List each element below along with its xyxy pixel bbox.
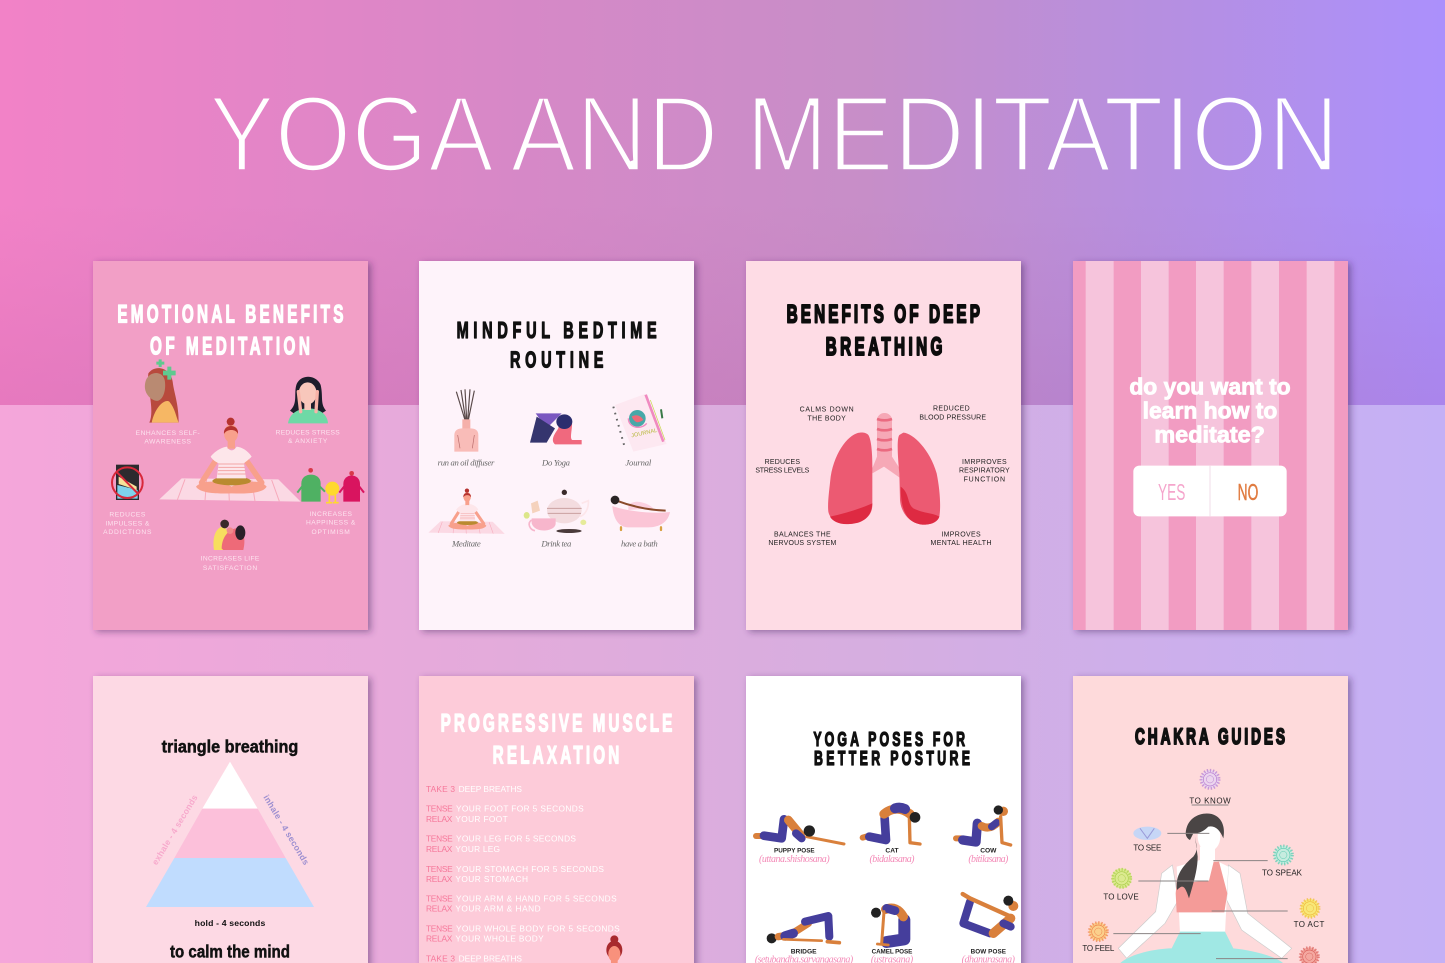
label: reduces stress — [276, 429, 340, 445]
icon: journal — [613, 394, 667, 452]
label: bridge pose — [755, 949, 854, 963]
icon: crown chakra — [1201, 770, 1219, 789]
label: to know: TO KNOW — [1189, 796, 1231, 805]
steps list — [426, 784, 620, 963]
label: calms down: CALMS DOWN — [800, 407, 854, 414]
icon: puppy pose — [756, 819, 844, 844]
label: reduces stress levels: STRESS LEVELS — [755, 468, 810, 475]
label: reduces impulses: REDUCES — [109, 512, 146, 519]
label: increases happiness — [306, 511, 356, 536]
label: reduces impulses: ADDICTIONS — [103, 529, 152, 536]
panel: emotional benefits of meditation — [93, 261, 368, 630]
icon: throat chakra — [1274, 846, 1293, 864]
icon: journal: JOURNAL — [631, 428, 658, 439]
heading: yoga poses: BETTER POSTURE — [814, 747, 970, 770]
striped background — [1086, 261, 1334, 630]
steps list: YOUR FOOT — [455, 814, 508, 824]
poll buttons: YES — [1158, 479, 1185, 505]
label: enhances self-awareness: ENHANCES SELF- — [136, 430, 200, 437]
label: puppy pose: (uttana.shishosana) — [759, 854, 830, 865]
label: cow pose: (bitilasana) — [968, 854, 1009, 865]
label: increases happiness: OPTIMISM — [311, 529, 350, 536]
heading: emotional benefits: EMOTIONAL BENEFITS — [117, 301, 343, 329]
label: reduced blood pressure: BLOOD PRESSURE — [919, 414, 986, 421]
poll buttons — [1133, 466, 1287, 516]
label: reduces impulses — [103, 512, 152, 536]
steps list: YOUR LEG — [455, 844, 500, 854]
steps list: RELAX — [426, 844, 453, 854]
label: improves mental health: IMPROVES — [941, 531, 981, 538]
panel: yoga poses for better posture — [746, 676, 1021, 963]
label: improves respiratory function: IMRPROVES — [962, 459, 1007, 466]
icon: crossed-out chocolate bar — [112, 465, 143, 500]
icon: cow pose — [956, 805, 1011, 845]
label: increases life satisfaction: SATISFACTION — [203, 565, 257, 572]
triangle chart — [146, 762, 314, 907]
label: increases happiness: INCREASES — [309, 511, 353, 518]
steps list: DEEP BREATHS — [459, 784, 522, 794]
panel: chakra guides — [1073, 676, 1348, 963]
heading: mindful bedtime routine: ROUTINE — [510, 347, 603, 373]
heading: question: learn how to — [1143, 397, 1277, 423]
steps list: YOUR ARM & HAND FOR 5 SECONDS — [456, 894, 617, 904]
label: calms down: THE BODY — [807, 415, 846, 422]
icon: camel pose — [871, 908, 904, 945]
label: improves mental health: MENTAL HEALTH — [930, 540, 991, 547]
label: increases life satisfaction — [201, 556, 260, 572]
label: hold: hold - 4 seconds — [195, 918, 266, 928]
label: drink tea: Drink tea — [540, 539, 571, 549]
label: reduces impulses: IMPULSES & — [105, 520, 150, 527]
label: to see: TO SEE — [1133, 844, 1161, 853]
icon: meditating figure — [428, 488, 505, 534]
panel: mindful bedtime routine — [419, 261, 694, 630]
icon: embracing couple — [213, 520, 245, 550]
steps list: TENSE — [426, 924, 453, 934]
icon: cat pose — [863, 808, 920, 844]
poll buttons: NO — [1238, 479, 1258, 505]
steps list: YOUR WHOLE BODY FOR 5 SECONDS — [456, 924, 620, 934]
label: cat pose: CAT — [885, 847, 899, 854]
icon: bathtub — [611, 496, 670, 530]
steps list: RELAX — [426, 814, 453, 824]
label: to speak: TO SPEAK — [1262, 869, 1303, 878]
heading: emotional benefits — [117, 301, 343, 361]
label: oil diffuser: run an oil diffuser — [438, 458, 495, 468]
label: cow pose — [968, 847, 1009, 865]
label: puppy pose: PUPPY POSE — [774, 847, 815, 854]
icon: bridge pose — [767, 916, 839, 943]
title: YOGA AND MEDITATION — [209, 73, 1339, 194]
icon: happy characters — [297, 468, 364, 503]
icon: root chakra — [1300, 947, 1319, 963]
heading: benefits of deep breathing: BREATHING — [826, 333, 942, 361]
heading: mindful bedtime routine: MINDFUL BEDTIME — [457, 318, 657, 344]
leader lines — [1113, 805, 1288, 959]
icon: bow pose — [963, 894, 1018, 933]
label: exhale: exhale - 4 seconds — [150, 793, 200, 867]
label: cat pose: (bidalasana) — [869, 854, 915, 865]
heading: question: meditate? — [1154, 421, 1265, 447]
steps list: TENSE — [426, 834, 453, 844]
heading: progressive muscle relaxation: PROGRESSIVE MUSCLE — [441, 710, 672, 738]
icon: meditator head — [606, 935, 622, 963]
background: upper band shading — [0, 0, 1445, 405]
steps list: RELAX — [426, 934, 453, 944]
steps list: YOUR LEG FOR 5 SECONDS — [456, 834, 576, 844]
label: balances nervous system: NERVOUS SYSTEM — [768, 540, 837, 547]
steps list: TENSE — [426, 864, 453, 874]
label: cow pose: COW — [980, 847, 997, 854]
heading: chakra guides: CHAKRA GUIDES — [1135, 724, 1285, 749]
label: reduces stress: & ANXIETY — [288, 438, 328, 445]
label: reduced blood pressure: REDUCED — [933, 406, 970, 413]
steps list: RELAX — [426, 904, 453, 914]
label: meditate: Meditate — [451, 539, 481, 549]
label: calms down — [800, 407, 854, 422]
heading: emotional benefits: OF MEDITATION — [150, 333, 310, 361]
icon: meditating figure on mat — [159, 418, 301, 502]
label: camel pose: CAMEL POSE — [872, 949, 912, 956]
heading: yoga poses: YOGA POSES FOR — [813, 728, 965, 751]
label: bow pose: BOW POSE — [971, 949, 1006, 956]
icon: self-aware woman — [145, 359, 179, 423]
label: puppy pose — [759, 847, 830, 865]
label: balances nervous system — [768, 531, 837, 547]
icon: oil diffuser — [454, 389, 478, 452]
background: upper gradient band — [0, 0, 1445, 405]
label: balances nervous system: BALANCES THE — [774, 531, 831, 538]
panel: progressive muscle relaxation — [419, 676, 694, 963]
label: improves respiratory function: RESPIRATORY — [959, 468, 1010, 475]
label: bow pose — [962, 949, 1016, 963]
steps list: TAKE 3 — [426, 784, 455, 794]
heading: benefits of deep breathing: BENEFITS OF DEEP — [787, 301, 980, 328]
heading: progressive muscle relaxation — [441, 710, 672, 769]
icon: sacral chakra — [1089, 922, 1108, 941]
label: inhale: inhale - 4 seconds — [261, 793, 311, 867]
label: increases happiness: HAPPINESS & — [306, 520, 356, 527]
heading: mindful bedtime routine — [457, 318, 657, 373]
heading: triangle breathing: triangle breathing — [162, 737, 298, 757]
label: camel pose — [871, 949, 914, 963]
panel: do you want to learn how to meditate — [1073, 261, 1348, 630]
icon: third eye chakra — [1133, 827, 1161, 840]
panel: triangle breathing — [93, 676, 368, 963]
panel: benefits of deep breathing — [746, 261, 1021, 630]
steps list: YOUR FOOT FOR 5 SECONDS — [456, 804, 584, 814]
label: enhances self-awareness: AWARENESS — [144, 439, 192, 446]
steps list: YOUR WHOLE BODY — [455, 934, 544, 944]
steps list: YOUR STOMACH — [455, 874, 528, 884]
icon: lungs — [828, 413, 940, 525]
heading: question: do you want to — [1129, 373, 1291, 399]
steps list: RELAX — [426, 874, 453, 884]
icon: yoga pose — [530, 413, 582, 444]
icon: stressed woman — [288, 377, 328, 423]
label: reduces stress: REDUCES STRESS — [276, 429, 340, 436]
steps list: TENSE — [426, 894, 453, 904]
steps list: TENSE — [426, 804, 453, 814]
caption: to calm the mind: to calm the mind — [170, 941, 290, 961]
icon: heart chakra — [1112, 868, 1132, 888]
label: have a bath: have a bath — [621, 539, 658, 549]
label: increases life satisfaction: INCREASES LIFE — [201, 556, 260, 563]
seated figure illustration — [1118, 813, 1292, 963]
label: improves respiratory function: FUNCTION — [964, 477, 1005, 484]
heading: benefits of deep breathing — [787, 301, 980, 361]
steps list: YOUR STOMACH FOR 5 SECONDS — [456, 864, 604, 874]
label: reduced blood pressure — [919, 406, 986, 421]
label: bridge pose: BRIDGE — [791, 949, 817, 956]
label: enhances self-awareness — [136, 430, 200, 446]
label: reduces stress levels — [755, 459, 810, 475]
heading: yoga poses — [813, 728, 970, 770]
label: journal: Journal — [625, 458, 652, 468]
icon: teapot and cup — [524, 490, 588, 533]
label: do yoga: Do Yoga — [541, 458, 570, 468]
label: to act: TO ACT — [1294, 920, 1324, 929]
label: cat pose — [869, 847, 915, 865]
label: improves mental health — [930, 531, 991, 547]
steps list: YOUR ARM & HAND — [455, 904, 541, 914]
label: improves respiratory function — [959, 459, 1010, 484]
heading: progressive muscle relaxation: RELAXATION — [493, 742, 619, 769]
label: to feel: TO FEEL — [1082, 944, 1115, 953]
label: reduces stress levels: REDUCES — [765, 459, 800, 466]
icon: solar plexus chakra — [1301, 899, 1319, 918]
label: to love: TO LOVE — [1103, 893, 1139, 902]
background: lower lighter band — [0, 405, 1445, 963]
heading: question — [1129, 373, 1291, 447]
